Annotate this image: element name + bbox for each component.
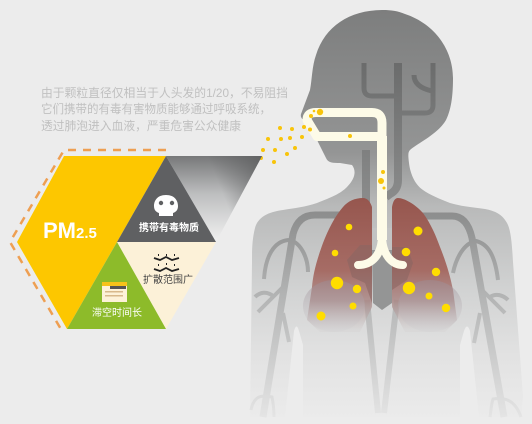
right lung xyxy=(392,198,457,332)
lower lung lobes xyxy=(303,280,462,332)
panel: carries toxins: 携带有毒物质 xyxy=(139,221,199,234)
lung particles xyxy=(316,224,450,320)
panel: long retention xyxy=(67,242,166,329)
description text: 透过肺泡进入血液，严重危害公众健康 xyxy=(41,118,241,133)
cone from hexagon to mouth xyxy=(166,156,262,242)
body vessels xyxy=(251,215,521,417)
icon: waves xyxy=(154,255,179,271)
head and neck vessels xyxy=(364,63,433,215)
icon: calendar xyxy=(102,282,127,302)
left lung xyxy=(307,198,372,332)
description text: 由于颗粒直径仅相当于人头发的1/20，不易阻挡 xyxy=(41,85,288,100)
human body silhouette xyxy=(250,10,523,417)
description text xyxy=(41,85,288,133)
panel: PM2.5 yellow section xyxy=(17,156,166,329)
panel: carries toxins xyxy=(117,156,216,242)
panel: wide spread xyxy=(117,242,216,329)
panel: PM2.5 yellow section: PM2.5 xyxy=(43,218,97,243)
airway xyxy=(307,112,403,265)
inhaled particles xyxy=(259,109,386,190)
heart xyxy=(372,228,392,310)
panel: wide spread: 扩散范围广 xyxy=(143,273,193,286)
icon: skull xyxy=(154,195,178,216)
description text: 它们携带的有毒有害物质能够通过呼吸系统， xyxy=(41,101,271,116)
panel: long retention: 滞空时间长 xyxy=(92,306,142,319)
dashed hexagon outline xyxy=(10,150,166,331)
